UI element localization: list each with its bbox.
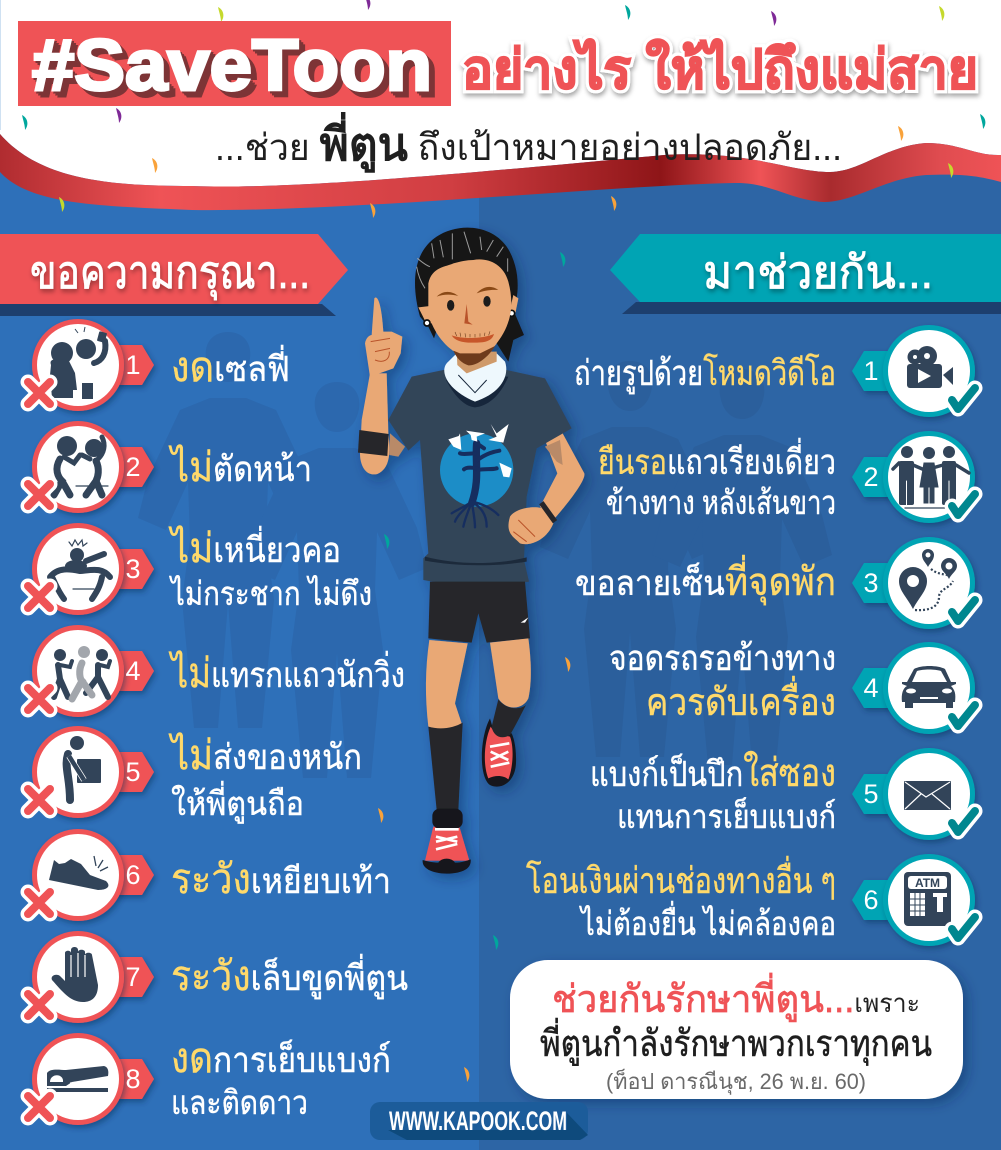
callout: protect Toon bbox=[510, 960, 963, 1099]
label 2: ไม่ตัดหน้า bbox=[168, 444, 312, 490]
left banner heading: ขอความกรุณา... bbox=[30, 246, 310, 301]
label 5: ไม่ส่งของหนัก bbox=[168, 732, 362, 778]
icon: people in line bbox=[893, 446, 969, 508]
right shoe bbox=[482, 718, 516, 787]
website footer badge bbox=[370, 1102, 588, 1140]
label 6: ระวังเหยียบเท้า bbox=[171, 856, 391, 902]
icon: neck grabbing bbox=[50, 540, 110, 599]
item 5: no heavy items: 5 bbox=[125, 757, 141, 787]
label 8: งดการเย็บแบงก์ bbox=[171, 1035, 391, 1081]
label 3: ไม่เหนี่ยวคอ bbox=[168, 525, 341, 571]
icon: map pins bbox=[899, 549, 957, 610]
label 3 bbox=[168, 525, 372, 612]
label 6 bbox=[526, 856, 836, 942]
item 1: no selfie bbox=[28, 319, 290, 411]
hair back and ponytail bbox=[415, 228, 524, 362]
item 7: watch nails: 7 bbox=[125, 962, 141, 992]
label 2 bbox=[598, 438, 836, 521]
label 4: ควรดับเครื่อง bbox=[646, 676, 836, 724]
subtitle: ...ช่วย พี่ตูน ถึงเป้าหมายอย่างปลอดภัย... bbox=[215, 112, 842, 173]
label 6: ไม่ต้องยื่น ไม่คล้องคอ bbox=[578, 901, 836, 942]
right banner bbox=[610, 234, 1001, 314]
item 4: parking bbox=[609, 639, 975, 734]
t-shirt bbox=[388, 370, 572, 585]
item 3: signature at rest stop: 3 bbox=[863, 568, 879, 598]
upper body bbox=[358, 228, 584, 585]
background runner silhouettes bbox=[138, 332, 832, 778]
icon: selfie people bbox=[50, 327, 107, 399]
item 6: transfer bbox=[526, 854, 975, 946]
label 7: ระวังเล็บขูดพี่ตูน bbox=[171, 953, 408, 999]
label 5: ให้พี่ตูนถือ bbox=[171, 781, 304, 824]
ears bbox=[418, 295, 518, 323]
icon: sneaker bbox=[49, 856, 108, 890]
item 8: no stapling: 8 bbox=[125, 1064, 141, 1094]
title thai text: อย่างไร ให้ไปถึงแม่สาย bbox=[462, 38, 978, 100]
left shoe bbox=[423, 809, 471, 874]
right leg bbox=[490, 638, 531, 707]
label 3: ไม่กระชาก ไม่ดึง bbox=[168, 575, 372, 612]
do list bbox=[526, 325, 975, 946]
label 5 bbox=[168, 732, 362, 824]
callout line 2: พี่ตูนกำลังรักษาพวกเราทุกคน bbox=[540, 1017, 932, 1066]
title thai text: อย่างไร ให้ไปถึงแม่สาย bbox=[462, 38, 978, 100]
shorts bbox=[428, 582, 530, 643]
label 8: และติดดาว bbox=[171, 1084, 308, 1121]
icon: hand bbox=[52, 947, 98, 1002]
icon: pushing people bbox=[54, 436, 108, 495]
right arm bbox=[540, 432, 584, 522]
label 5: แทนการเย็บแบงก์ bbox=[617, 797, 836, 835]
hashtag box bbox=[18, 21, 451, 106]
eyes bbox=[447, 300, 454, 311]
title block bbox=[18, 21, 978, 173]
icon: ATM: ATM bbox=[915, 876, 940, 890]
fist and watch bbox=[508, 507, 553, 544]
callout line 1: ช่วยกันรักษาพี่ตูน...เพราะ bbox=[552, 973, 920, 1022]
item 1: video mode bbox=[574, 325, 975, 417]
icon: runners in line bbox=[54, 646, 110, 699]
item 6: watch feet: 6 bbox=[125, 860, 141, 890]
item 6: transfer: 6 bbox=[863, 885, 879, 915]
icon: person with box bbox=[67, 736, 101, 800]
label 5: แบงก์เป็นปึกใส่ซอง bbox=[590, 751, 836, 795]
website text: WWW.KAPOOK.COM bbox=[389, 1106, 567, 1136]
icon: stapler bbox=[47, 1066, 108, 1092]
item 4: no cutting runner line: 4 bbox=[125, 656, 141, 686]
mouth and beard bbox=[452, 334, 494, 343]
item 4: parking: 4 bbox=[863, 673, 879, 703]
label 1: ถ่ายรูปด้วยโหมดวิดีโอ bbox=[574, 353, 836, 394]
lower body bbox=[423, 582, 531, 874]
label 1: งดเซลฟี่ bbox=[171, 344, 290, 390]
item 8: no stapling bbox=[28, 1033, 391, 1125]
hair strands bbox=[417, 232, 508, 288]
item 3: signature at rest stop bbox=[575, 537, 975, 629]
right banner heading: มาช่วยกัน... bbox=[703, 246, 933, 298]
eyebrows bbox=[437, 287, 498, 297]
label 4 bbox=[609, 639, 836, 724]
item 6: watch feet bbox=[28, 829, 391, 921]
item 4: no cutting runner line bbox=[28, 625, 405, 717]
neck bbox=[457, 352, 497, 373]
item 5: envelope bbox=[590, 748, 975, 840]
callout source: (ท็อป ดารณีนุช, 26 พ.ย. 60) bbox=[606, 1067, 866, 1095]
item 3: no neck pulling: 3 bbox=[125, 554, 141, 584]
shirt tree emblem bbox=[440, 424, 513, 527]
left leg bbox=[426, 640, 468, 729]
item 5: envelope: 5 bbox=[863, 779, 879, 809]
item 2: no cutting in bbox=[28, 421, 312, 513]
label 5 bbox=[590, 751, 836, 835]
icon: envelope bbox=[904, 781, 951, 810]
raised arm bbox=[360, 373, 389, 474]
do-not list bbox=[28, 319, 408, 1125]
hashtag text: #SaveToon bbox=[32, 26, 432, 106]
nose bbox=[464, 304, 473, 325]
item 1: no selfie: 1 bbox=[125, 350, 141, 380]
label 4: จอดรถรอข้างทาง bbox=[609, 639, 836, 678]
item 7: watch nails bbox=[28, 931, 408, 1023]
collar bbox=[446, 377, 508, 407]
left banner bbox=[0, 234, 348, 316]
face bbox=[428, 259, 511, 359]
label 2: ยืนรอแถวเรียงเดี่ยว bbox=[598, 438, 836, 482]
label 4: ไม่แทรกแถวนักวิ่ง bbox=[168, 650, 405, 696]
label 3: ขอลายเซ็นที่จุดพัก bbox=[575, 555, 836, 606]
item 3: no neck pulling bbox=[28, 523, 372, 615]
top ribbon and white header bbox=[0, 0, 1001, 210]
item 1: video mode: 1 bbox=[863, 356, 879, 386]
item 2: queue bbox=[598, 431, 975, 523]
icon: video camera bbox=[907, 346, 953, 388]
icon: car bbox=[902, 666, 956, 708]
item 5: no heavy items bbox=[28, 726, 362, 824]
label 6: โอนเงินผ่านช่องทางอื่น ๆ bbox=[526, 856, 836, 901]
item 2: no cutting in: 2 bbox=[125, 452, 141, 482]
central runner figure bbox=[358, 228, 584, 874]
label 2: ข้างทาง หลังเส้นขาว bbox=[606, 484, 836, 521]
item 2: queue: 2 bbox=[863, 462, 879, 492]
label 8 bbox=[171, 1035, 391, 1121]
